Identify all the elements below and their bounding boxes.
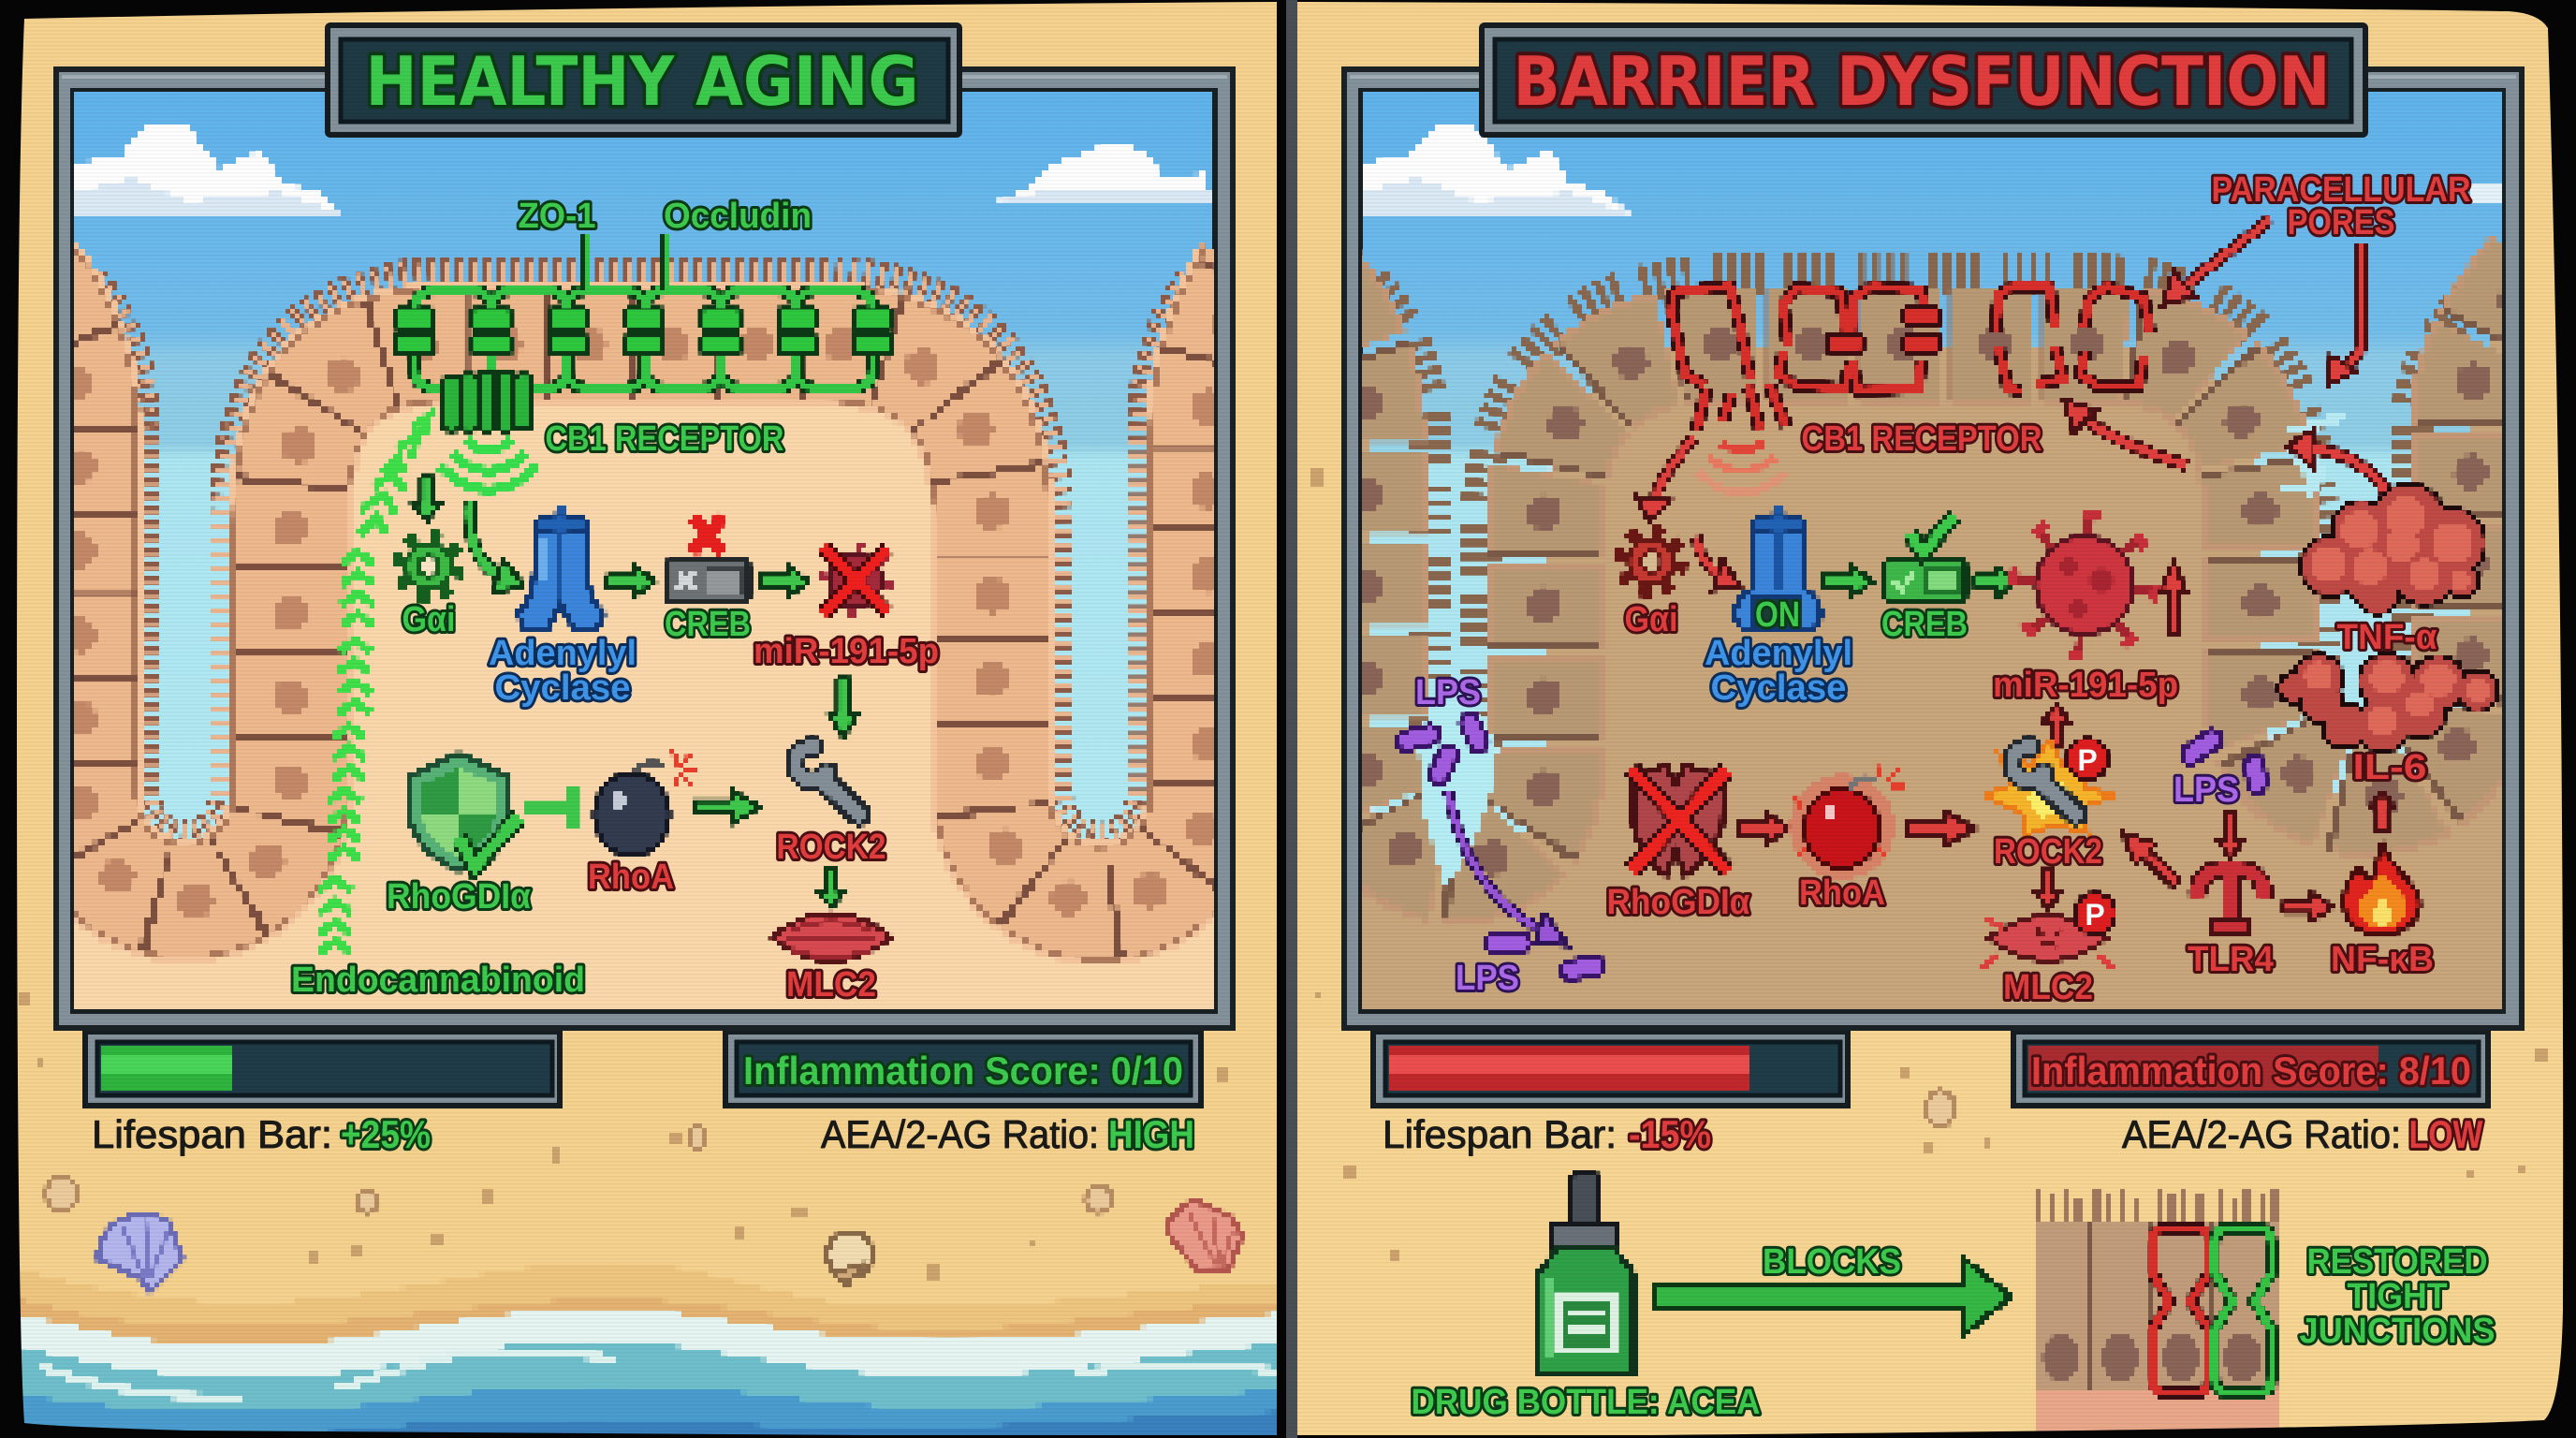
label: MLC2: MLC2 bbox=[2003, 968, 2093, 1007]
label: miR-191-5p: miR-191-5p bbox=[1993, 666, 2178, 705]
icon: TLR4 receptor bbox=[2198, 869, 2263, 932]
arrow: ROCK2 to miR bbox=[2043, 705, 2070, 744]
icon: NF-kB flame bbox=[2344, 843, 2420, 934]
label: ON badge: ON bbox=[1755, 595, 1800, 635]
label: paracellular: PARACELLULAR bbox=[2211, 170, 2471, 210]
text: lifespan dysfunction: -15% bbox=[1629, 1112, 1711, 1156]
label: CB1 receptor: CB1 RECEPTOR bbox=[545, 419, 784, 459]
curved arrow: to adenylyl cyclase bbox=[470, 502, 524, 594]
text: lifespan dysfunction: Lifespan Bar: bbox=[1383, 1112, 1617, 1156]
arrow: pores to top gap bbox=[2162, 220, 2270, 305]
panel: healthy aging bbox=[19, 66, 1254, 1031]
icon: CREB switch off bbox=[666, 561, 749, 601]
label: CREB: CREB bbox=[665, 605, 751, 644]
label: LPS right: LPS bbox=[2174, 770, 2239, 810]
label: RhoGDI-alpha: RhoGDIα bbox=[387, 877, 531, 917]
title: healthy aging: HEALTHY AGING bbox=[365, 42, 919, 121]
label: RhoA: RhoA bbox=[1799, 873, 1885, 913]
status: inflammation score dysfunction bbox=[2011, 1031, 2491, 1108]
icon: G-alpha-i gear bbox=[401, 538, 457, 594]
text: AEA ratio healthy: HIGH bbox=[1108, 1112, 1194, 1156]
label: G-alpha-i: Gαi bbox=[402, 600, 455, 639]
label: RhoGDI-alpha: RhoGDIα bbox=[1606, 883, 1750, 922]
label: Endocannabinoid: Endocannabinoid bbox=[291, 961, 585, 1000]
text: lifespan healthy: +25% bbox=[341, 1112, 431, 1156]
text: lifespan healthy bbox=[92, 1112, 431, 1156]
arrow: LPS to TLR4 bbox=[2217, 813, 2244, 858]
text: lifespan healthy: Lifespan Bar: bbox=[92, 1112, 332, 1156]
centre divider strip bbox=[1286, 0, 1297, 1438]
text: AEA ratio dysfunction: LOW bbox=[2409, 1112, 2483, 1156]
arrow: pores to side gap bbox=[2329, 245, 2362, 385]
icon: damaged gear bbox=[1623, 534, 1679, 590]
icon: MLC2 muscle phosphorylated bbox=[1983, 893, 2115, 969]
label: RhoA: RhoA bbox=[588, 858, 674, 897]
label: LPS bottom: LPS bbox=[1456, 959, 1519, 998]
icon: splayed CB1 receptor bbox=[1696, 384, 1786, 431]
label: Cyclase: Cyclase bbox=[1711, 668, 1846, 708]
panel: barrier dysfunction bbox=[1307, 66, 2537, 1432]
label: G-alpha-i: Gαi bbox=[1625, 600, 1677, 639]
LPS bacteria in tissue bbox=[1486, 726, 2267, 981]
LPS bacteria in crypt bbox=[1395, 711, 1491, 786]
small shells bbox=[46, 1091, 1954, 1212]
arrow: miR upregulated bbox=[2160, 562, 2187, 633]
arrow: blocks bbox=[1655, 1257, 2011, 1336]
dysfunction scene bbox=[1307, 92, 2537, 1010]
arrow: RhoGDI to RhoA bbox=[1738, 814, 1789, 844]
text: AEA ratio healthy: AEA/2-AG Ratio: bbox=[821, 1112, 1099, 1156]
icon: adenylyl cyclase bbox=[518, 506, 604, 628]
icon: crossed-out miR virus bbox=[822, 547, 889, 614]
shell: cream bbox=[827, 1232, 872, 1284]
arrow: CREB to miR bbox=[1975, 566, 2015, 596]
icon: red X over CREB bbox=[693, 517, 723, 552]
label: Cyclase: Cyclase bbox=[494, 668, 631, 708]
curved arrow: LPS leakage bbox=[1448, 790, 1568, 946]
arrow: miR to ROCK2 bbox=[828, 679, 858, 738]
arrow: ROCK2 to MLC2 bbox=[816, 868, 846, 907]
label: Adenylyl: Adenylyl bbox=[489, 634, 637, 673]
label: drug bottle: DRUG BOTTLE: ACEA bbox=[1412, 1383, 1760, 1422]
inhibition bar: shield to RhoA bbox=[526, 786, 573, 829]
icon: IL-6 cloud bbox=[2276, 652, 2500, 754]
status: inflammation score healthy: Inflammation Score: 0/10 bbox=[743, 1049, 1183, 1093]
label: restored tight junctions bbox=[2299, 1242, 2496, 1351]
label: NF-kB: NF-κB bbox=[2331, 940, 2434, 979]
label: restored tight junctions: JUNCTIONS bbox=[2299, 1312, 2496, 1351]
label: blocks: BLOCKS bbox=[1763, 1242, 1901, 1282]
title: healthy aging bbox=[325, 22, 962, 138]
healthy scene bbox=[19, 92, 1254, 1010]
label: ROCK2: ROCK2 bbox=[1994, 832, 2102, 872]
arrow: RhoA to ROCK2 bbox=[694, 790, 760, 824]
label: phosphate on MLC2: P bbox=[2085, 898, 2105, 932]
arrow: TLR4 to ROCK2 bbox=[2112, 822, 2187, 894]
icon: TNF-alpha cloud bbox=[2299, 482, 2487, 616]
icon: wrench ROCK2 bbox=[796, 747, 859, 814]
icon: ACEA drug bottle bbox=[1539, 1173, 1633, 1372]
icon: restored epithelium bbox=[2034, 1187, 2280, 1432]
healthy labels bbox=[291, 197, 939, 1005]
dysfunction icons and arrows bbox=[1395, 220, 2500, 1432]
icon: ROCK2 wrench with burst bbox=[1984, 739, 2114, 835]
broken tight junctions bbox=[1672, 286, 2150, 391]
curved arrow: damage to junctions bbox=[2064, 400, 2188, 465]
CB1 fading signal waves bbox=[1699, 443, 1785, 492]
arrow: cyclase to CREB bbox=[1822, 566, 1873, 596]
title: barrier dysfunction: BARRIER DYSFUNCTION bbox=[1513, 42, 2331, 121]
label: ZO-1: ZO-1 bbox=[519, 197, 595, 236]
dysfunction labels bbox=[1412, 170, 2496, 1422]
healthy icons and arrows bbox=[319, 234, 891, 961]
label: TLR4: TLR4 bbox=[2188, 940, 2274, 979]
label: restored tight junctions: TIGHT bbox=[2348, 1277, 2447, 1316]
status: inflammation score dysfunction: Inflammation Score: 8/10 bbox=[2031, 1049, 2471, 1093]
arrow: RhoA to ROCK2 bbox=[1906, 813, 1976, 844]
arrow: ROCK2 to MLC2 bbox=[2035, 871, 2061, 908]
label: pores: PORES bbox=[2288, 203, 2394, 242]
status: lifespan bar healthy bbox=[82, 1031, 563, 1108]
icon: CB1 receptor bbox=[444, 373, 531, 431]
icon: bomb RhoA bbox=[594, 749, 697, 856]
icon: large miR virus bbox=[2013, 514, 2156, 656]
label: miR-191-5p: miR-191-5p bbox=[754, 632, 939, 671]
icon: MLC2 muscle bbox=[772, 914, 891, 961]
arrow: to G-alpha-i bbox=[412, 477, 442, 521]
label: TNF-alpha: TNF-α bbox=[2336, 618, 2437, 657]
label: ROCK2: ROCK2 bbox=[777, 828, 886, 867]
shell: pink bbox=[1167, 1200, 1242, 1269]
curved arrow: gear to cyclase bbox=[1696, 536, 1740, 590]
title: barrier dysfunction bbox=[1479, 22, 2368, 138]
label: CREB: CREB bbox=[1881, 605, 1968, 644]
label: restored tight junctions: RESTORED bbox=[2306, 1242, 2488, 1282]
label: Occludin: Occludin bbox=[664, 197, 812, 236]
shell: purple bbox=[98, 1215, 183, 1292]
tight junction network bbox=[396, 234, 891, 389]
arrow: CREB to miR bbox=[760, 566, 809, 596]
label: CB1 receptor: CB1 RECEPTOR bbox=[1801, 419, 2042, 459]
label: LPS crypt: LPS bbox=[1415, 673, 1481, 712]
arrow: TLR4 to NF-kB bbox=[2284, 893, 2333, 921]
beach shells bbox=[46, 1091, 1954, 1292]
endocannabinoid chevrons bbox=[319, 417, 429, 952]
text: AEA ratio dysfunction: AEA/2-AG Ratio: bbox=[2122, 1112, 2401, 1156]
icon: active red bomb bbox=[1790, 766, 1905, 879]
icon: CREB switch on bbox=[1883, 561, 1966, 600]
icon: torn RhoGDI-alpha bbox=[1632, 766, 1727, 875]
icon: active adenylyl cyclase bbox=[1735, 506, 1821, 630]
arrow: NF-kB to IL-6 bbox=[2369, 792, 2395, 831]
label: Adenylyl: Adenylyl bbox=[1705, 634, 1852, 673]
curved arrow: CB1 to G-alpha-i bbox=[1636, 438, 1694, 521]
status: lifespan bar dysfunction bbox=[1370, 1031, 1851, 1108]
beach pebbles bbox=[19, 468, 2548, 1281]
icon: RhoGDI-alpha shield bbox=[408, 754, 520, 871]
status: inflammation score healthy bbox=[723, 1031, 1204, 1108]
curved arrow: TNF to cells bbox=[2287, 431, 2389, 495]
label: phosphate on ROCK2: P bbox=[2077, 743, 2098, 777]
icon: green check over CREB bbox=[1910, 517, 1954, 552]
CB1 signal waves bbox=[440, 440, 537, 490]
arrow: cyclase to CREB bbox=[607, 566, 655, 596]
label: MLC2: MLC2 bbox=[786, 965, 876, 1005]
label: IL-6: IL-6 bbox=[2353, 748, 2426, 787]
